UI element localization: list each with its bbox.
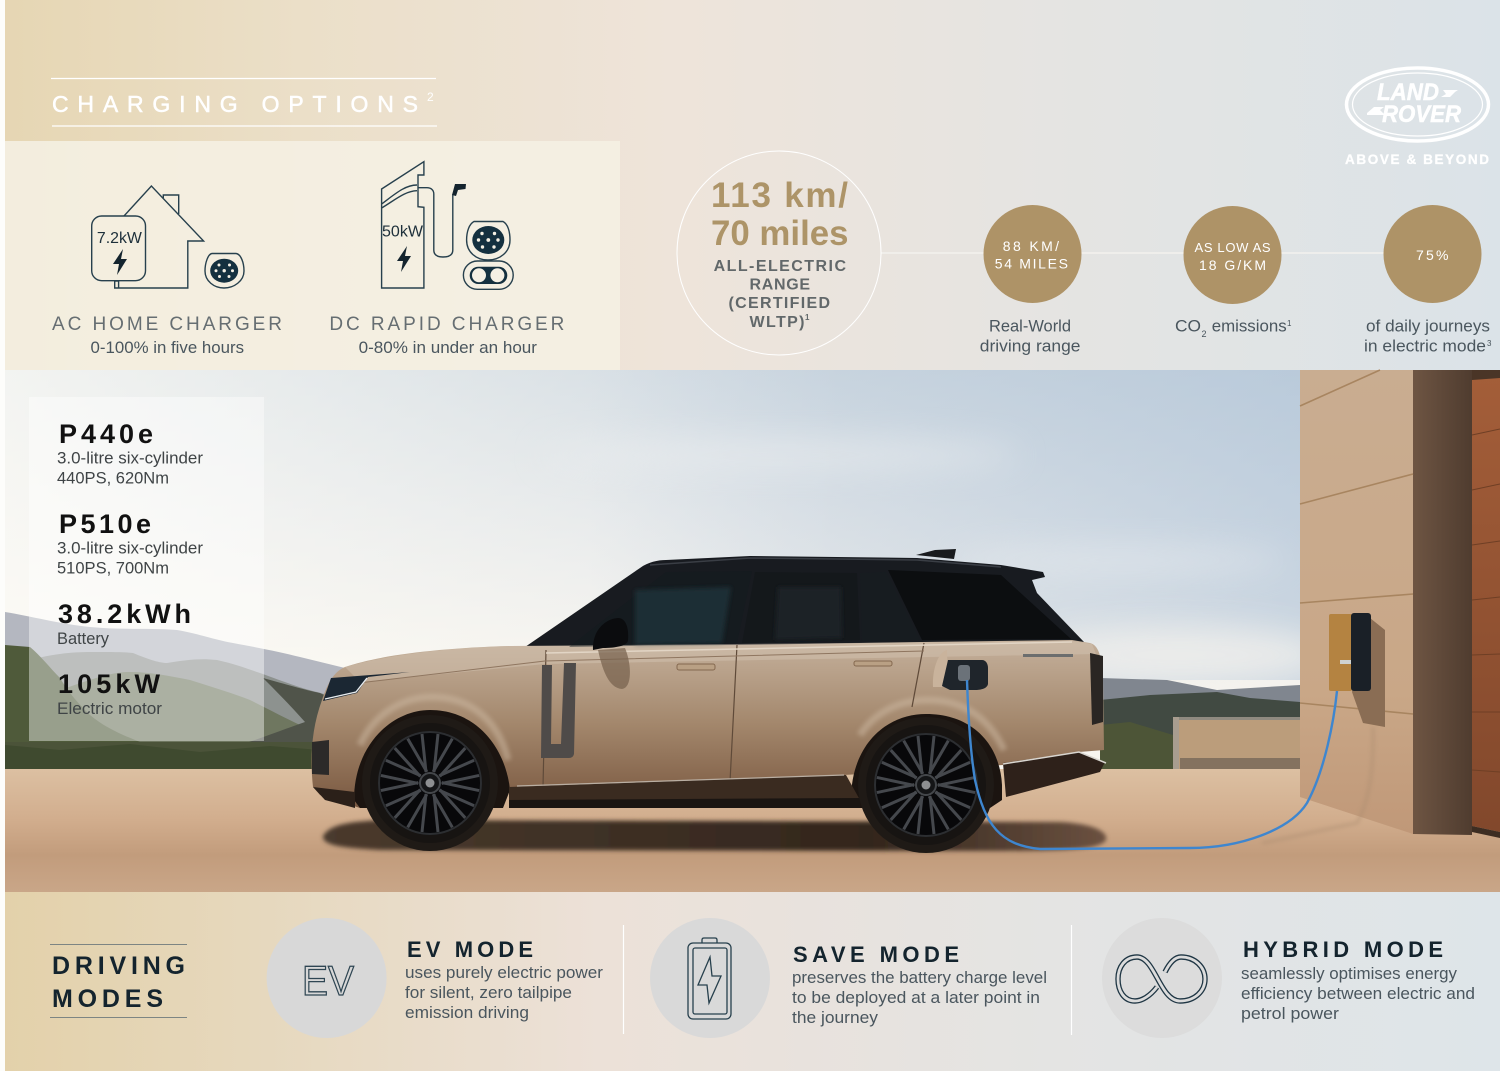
logo: Land Rover: LAND [1377,79,1439,106]
front wheel [362,715,498,851]
stat: all-electric range: 113 km/ [711,176,848,215]
logo: Land Rover: ABOVE & BEYOND [1345,152,1489,167]
stat: all-electric range: (CERTIFIED [728,295,830,312]
label: DC rapid charger: 0-80% in under an hour [359,338,537,357]
label: DC rapid charger [329,314,564,357]
car [312,549,1106,853]
wing mirror [593,618,628,650]
text: save mode: to be deployed at a later point in [792,988,1040,1007]
icon: rapid charger: 50kW [382,224,423,240]
car shadow [323,820,1106,851]
text: hybrid mode: petrol power [1241,1004,1339,1023]
label: AC home charger: 0-100% in five hours [90,338,244,357]
stat: all-electric range: ALL-ELECTRIC [714,258,846,275]
rear door glass [742,572,860,643]
roof fin [916,549,956,559]
heading: charging options: 2 [427,90,434,104]
sill chrome [517,775,844,786]
stat: all-electric range: 1 [805,313,810,322]
text: EV mode: EV MODE [407,937,533,962]
logo: Land Rover: ROVER [1382,101,1462,128]
stat: CO2 emissions: 18 G/KM [1199,257,1266,273]
heading: driving modes: DRIVING [52,952,185,980]
stat: daily journeys: of daily journeys [1366,317,1490,336]
mountains right [1100,678,1300,770]
text: EV mode: emission driving [405,1003,529,1022]
icon: home charger [92,186,244,288]
panel: engine specs: P510e [59,509,151,539]
shoulder highlight [345,641,1096,682]
stat: daily journeys: 3 [1487,339,1492,348]
icon: EV mode [267,918,387,1038]
roof and pillars [525,556,1084,652]
white left margin [0,0,5,1071]
stat: real-world range: 88 KM/ [1003,238,1059,254]
stat: CO2 emissions: 2 [1202,329,1207,339]
panel: engine specs: P440e [59,419,153,449]
door lines [350,642,1072,800]
stat: daily journeys: 75% [1416,247,1448,263]
icon: EV mode: EV [302,957,354,1004]
text: EV mode: for silent, zero tailpipe [405,983,572,1002]
stat: daily journeys [1364,205,1492,356]
heading: charging options: CHARGING OPTIONS [52,91,418,117]
stat: CO2 emissions: emissions [1212,317,1287,336]
text: save mode: preserves the battery charge level [792,968,1047,987]
stat: real-world range [980,205,1082,356]
rear door glass centre [775,587,842,640]
sky [5,370,1330,780]
panel: engine specs [29,397,264,741]
mountains left [5,612,345,770]
label: AC home charger: AC HOME CHARGER [52,314,282,335]
text: save mode [792,942,1047,1027]
stat: all-electric range: 70 miles [711,214,848,253]
charge port [933,650,988,690]
ground [5,769,1500,892]
panel: charging options background [5,141,620,370]
quarter glass [860,572,920,641]
page background: top band [0,0,1500,370]
logo: Land Rover [1345,68,1489,167]
mirror shadow [598,648,630,689]
label: DC rapid charger: DC RAPID CHARGER [329,314,564,335]
roof highlight [650,558,1001,567]
rear wheel [858,717,994,853]
stat: all-electric range [677,151,881,355]
panel: engine specs: 510PS, 700Nm [57,558,169,578]
stat: daily journeys: in electric mode [1364,337,1486,356]
panel: engine specs: 440PS, 620Nm [57,468,169,488]
rear glass [888,570,1071,640]
icon: home charger: 7.2kW [97,230,142,247]
icon: rapid charger [382,162,513,289]
hero photo [5,370,1500,892]
panel: engine specs: 3.0-litre six-cylinder [57,448,203,468]
stat: all-electric range: RANGE [750,276,810,294]
rear trim [1003,752,1106,764]
stat: CO2 emissions [1175,206,1292,339]
divider [622,925,624,1034]
wheel arches [354,710,1002,808]
stat: CO2 emissions: CO [1175,317,1201,336]
panel: engine specs: Electric motor [57,699,162,718]
front door glass [569,571,752,647]
text: hybrid mode: efficiency between electric and [1241,984,1475,1003]
front lip [313,787,355,808]
front door glass centre [635,587,731,645]
headlight [323,672,410,701]
front grille [312,740,329,775]
panel: engine specs: 38.2kWh [58,599,191,629]
side vent [541,663,576,758]
connector line [881,252,1384,254]
text: EV mode: uses purely electric power [405,963,603,982]
stat: CO2 emissions: AS LOW AS [1194,240,1271,255]
panel: engine specs: 3.0-litre six-cylinder [57,538,203,558]
under-sill [509,798,860,808]
panel: engine specs: Battery [57,629,109,648]
text: EV mode [405,937,603,1022]
heading: driving modes [50,944,187,1018]
body shell [312,640,1104,808]
icon: save mode battery [650,918,770,1038]
stat: CO2 emissions: 1 [1287,319,1292,328]
door handles [677,661,892,670]
rear bumper lower [1003,752,1105,797]
text: hybrid mode [1241,937,1475,1023]
stat: all-electric range: WLTP) [750,314,804,331]
low terrace wall [1173,717,1300,770]
heading: driving modes: MODES [52,985,163,1013]
icon: hybrid mode infinity [1102,918,1222,1038]
page background: bottom band [0,892,1500,1071]
text: hybrid mode: HYBRID MODE [1243,937,1443,962]
sill [509,775,860,800]
stat: real-world range: Real-World [989,317,1071,336]
stat: real-world range: driving range [980,337,1080,356]
label: AC home charger [52,314,282,357]
wheel arch flare highlights [360,697,1004,760]
rear light and strip [1023,653,1103,725]
text: hybrid mode: seamlessly optimises energy [1241,964,1457,983]
panel: engine specs: 105kW [58,669,161,699]
heading: charging options [51,78,437,126]
divider [1070,925,1072,1035]
text: save mode: the journey [792,1008,878,1027]
building wall [1300,370,1500,838]
blue charging cable [967,680,1337,849]
stat: real-world range: 54 MILES [995,256,1068,272]
wall charger [1262,613,1385,843]
text: save mode: SAVE MODE [793,942,959,967]
